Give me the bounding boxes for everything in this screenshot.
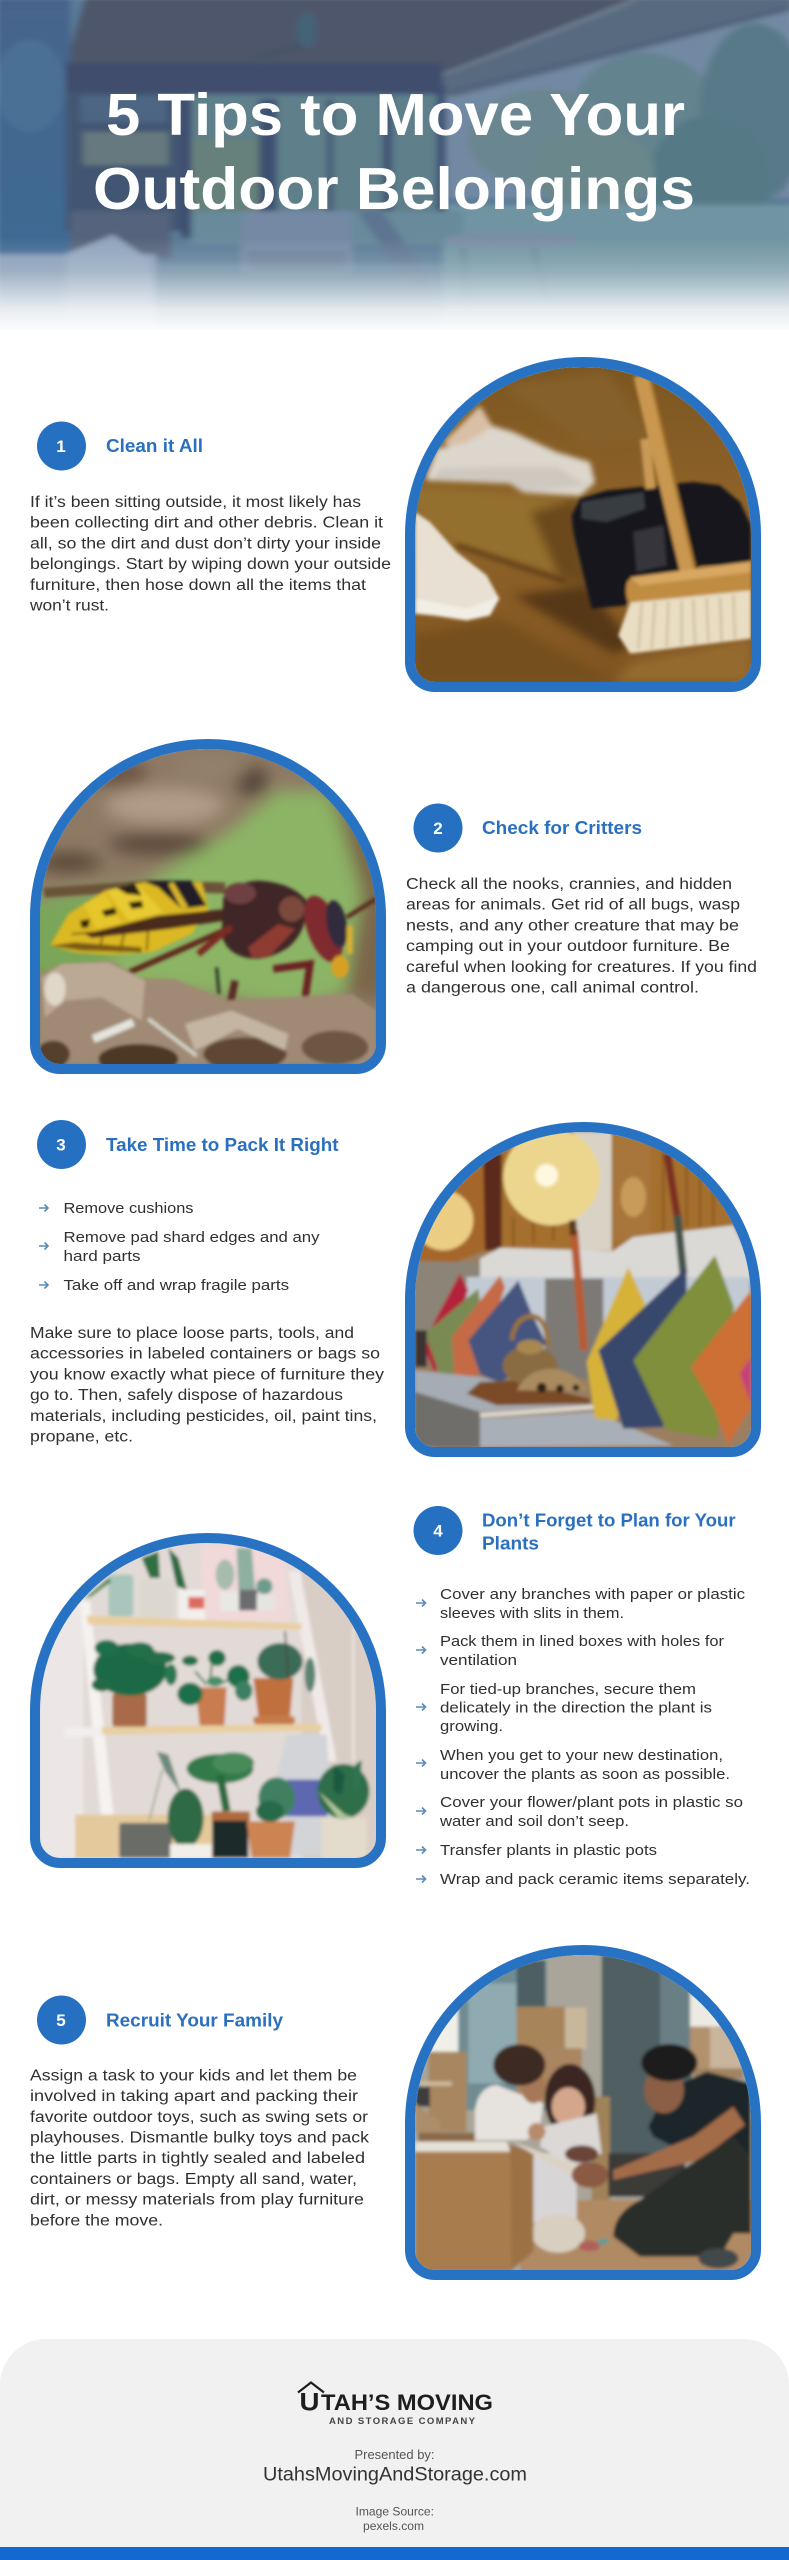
paragraph 1 (29, 494, 391, 614)
paragraph 5: containers or bags. Empty all sand, water, (30, 2171, 357, 2188)
image source: pexels.com (363, 2519, 424, 2533)
paragraph 1: furniture, then hose down all the items that (30, 577, 367, 594)
checklist 4: Cover your flower/plant pots in plastic so (440, 1794, 743, 1811)
paragraph 5: involved in taking apart and packing their (30, 2088, 358, 2105)
checklist 3: Remove pad shard edges and any (64, 1229, 320, 1246)
checklist 3: hard parts (64, 1248, 140, 1265)
badge 4: 4 (433, 1522, 443, 1540)
heading 4: Plants (482, 1532, 539, 1554)
paragraph 5: the little parts in tightly sealed and labeled (30, 2150, 365, 2167)
logo: U (300, 2388, 320, 2416)
paragraph 1: all, so the dirt and dust don’t dirty your inside (30, 535, 381, 552)
logo: AND STORAGE COMPANY (329, 2416, 476, 2427)
paragraph 5: favorite outdoor toys, such as swing sets or (30, 2109, 368, 2126)
presented by (263, 2447, 527, 2486)
checklist 4: uncover the plants as soon as possible. (440, 1766, 730, 1783)
footer panel (0, 2339, 789, 2560)
paragraph 3: Make sure to place loose parts, tools, and (30, 1325, 354, 1342)
paragraph 5: dirt, or messy materials from play furniture (30, 2192, 364, 2209)
paragraph 3: you know exactly what piece of furniture they (30, 1366, 384, 1383)
checklist 4 (416, 1586, 750, 1888)
paragraph 2: careful when looking for creatures. If you find (406, 959, 757, 976)
paragraph 3: accessories in labeled containers or bags so (30, 1346, 380, 1363)
logo (298, 2382, 493, 2427)
paragraph 1: won’t rust. (29, 598, 109, 614)
tip 5: text block (30, 1996, 369, 2229)
checklist 4: Pack them in lined boxes with holes for (440, 1633, 724, 1650)
photo 2: hornet on nest arch (25, 734, 392, 1079)
image source (356, 2504, 434, 2533)
paragraph 5: playhouses. Dismantle bulky toys and pack (30, 2130, 369, 2147)
photo 1: broom and dustpan arch (400, 352, 766, 697)
paragraph 1: been collecting dirt and other debris. Clean it (30, 515, 384, 532)
checklist 4: ventilation (440, 1652, 517, 1669)
badge 4 (414, 1506, 462, 1555)
checklist 4: For tied-up branches, secure them (440, 1681, 696, 1698)
paragraph 3: go to. Then, safely dispose of hazardous (30, 1387, 343, 1404)
photo 4: potted plants on shelves arch (25, 1528, 391, 1873)
photo 5: family packing boxes arch (400, 1940, 766, 2285)
hero banner photo (0, 0, 789, 350)
image source: Image Source: (356, 2504, 434, 2518)
title: 5 Tips to Move Your (106, 82, 685, 148)
presented by: UtahsMovingAndStorage.com (263, 2464, 527, 2486)
tip 2: text block (406, 804, 757, 996)
badge 2: 2 (433, 819, 443, 838)
bottom bar (0, 2547, 789, 2560)
paragraph 2: Check all the nooks, crannies, and hidden (406, 876, 732, 893)
checklist 4: water and soil don’t seep. (439, 1813, 629, 1830)
badge 5 (37, 1996, 86, 2044)
paragraph 1: belongings. Start by wiping down your outside (30, 556, 391, 573)
logo: TAH’S MOVING (321, 2390, 493, 2415)
paragraph 2: areas for animals. Get rid of all bugs, wasp (406, 897, 740, 914)
badge 1 (37, 422, 86, 470)
paragraph 3: materials, including pesticides, oil, paint tins, (30, 1408, 377, 1425)
paragraph 2 (406, 876, 757, 996)
heading 1: Clean it All (106, 435, 203, 456)
paragraph 5 (30, 2067, 369, 2229)
title (93, 82, 695, 222)
photo 3: colorful cushions arch (400, 1117, 766, 1462)
heading 4 (482, 1510, 736, 1554)
checklist 4: sleeves with slits in them. (440, 1605, 624, 1622)
badge 2 (414, 804, 462, 852)
checklist 4: delicately in the direction the plant is (440, 1700, 712, 1716)
heading 3: Take Time to Pack It Right (106, 1134, 338, 1155)
checklist 4: When you get to your new destination, (440, 1747, 723, 1764)
paragraph 2: nests, and any other creature that may be (406, 917, 739, 934)
paragraph 2: a dangerous one, call animal control. (406, 980, 699, 996)
heading 5: Recruit Your Family (106, 2010, 284, 2030)
checklist 4: Wrap and pack ceramic items separately. (440, 1871, 750, 1888)
tip 4: text block (414, 1506, 750, 1888)
checklist 3 (39, 1200, 320, 1294)
heading 4: Don’t Forget to Plan for Your (482, 1510, 736, 1530)
checklist 4: Cover any branches with paper or plastic (440, 1586, 746, 1603)
paragraph 2: camping out in your outdoor furniture. Be (406, 938, 730, 955)
badge 3 (37, 1120, 86, 1169)
badge 5: 5 (56, 2011, 66, 2030)
checklist 3: Remove cushions (64, 1200, 194, 1217)
paragraph 5: Assign a task to your kids and let them be (30, 2067, 357, 2084)
paragraph 3 (30, 1325, 384, 1446)
badge 3: 3 (56, 1136, 66, 1154)
presented by: Presented by: (354, 2447, 434, 2462)
tip 1: text block (29, 422, 391, 614)
paragraph 5: before the move. (30, 2212, 163, 2229)
title: Outdoor Belongings (93, 156, 695, 222)
tip 3: text block (30, 1120, 384, 1446)
heading 2: Check for Critters (482, 817, 642, 838)
checklist 4: Transfer plants in plastic pots (440, 1842, 657, 1859)
checklist 3: Take off and wrap fragile parts (64, 1277, 289, 1294)
checklist 4: growing. (440, 1718, 503, 1735)
paragraph 3: propane, etc. (30, 1428, 133, 1446)
badge 1: 1 (56, 437, 66, 456)
paragraph 1: If it’s been sitting outside, it most likely has (30, 494, 361, 511)
